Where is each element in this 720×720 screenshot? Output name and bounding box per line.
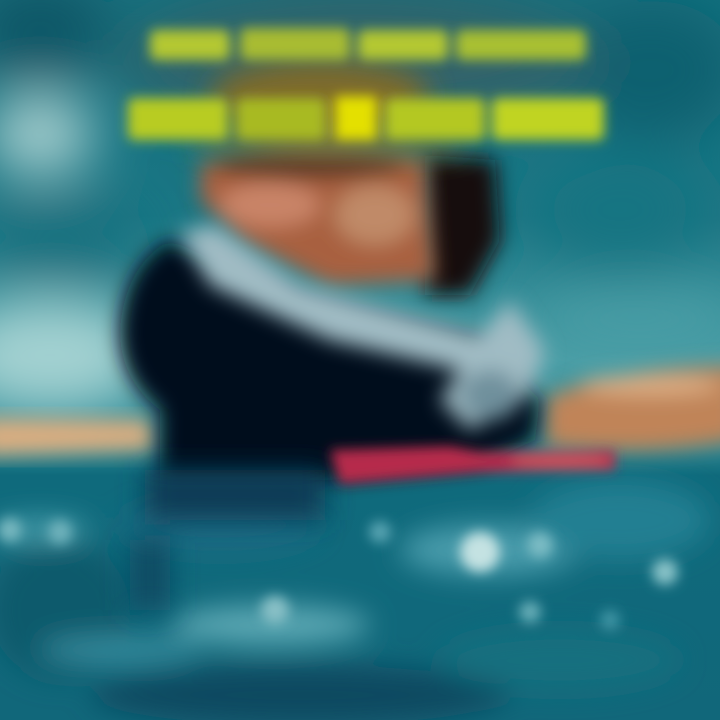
hair top: [190, 60, 470, 155]
arm: left: [0, 418, 156, 456]
water foreground: [0, 480, 710, 720]
swimmer body: dark jacket: [120, 240, 540, 480]
red strip: [330, 446, 615, 484]
arm: right: [545, 366, 720, 451]
water sparkles: [0, 518, 678, 630]
collar: pale scarf band: [180, 225, 545, 430]
swimmer face: [200, 149, 435, 285]
swimmer hair: [425, 155, 500, 295]
title: two illegible yellow lines: [128, 28, 604, 140]
swimmer lower body under water: [130, 470, 325, 610]
